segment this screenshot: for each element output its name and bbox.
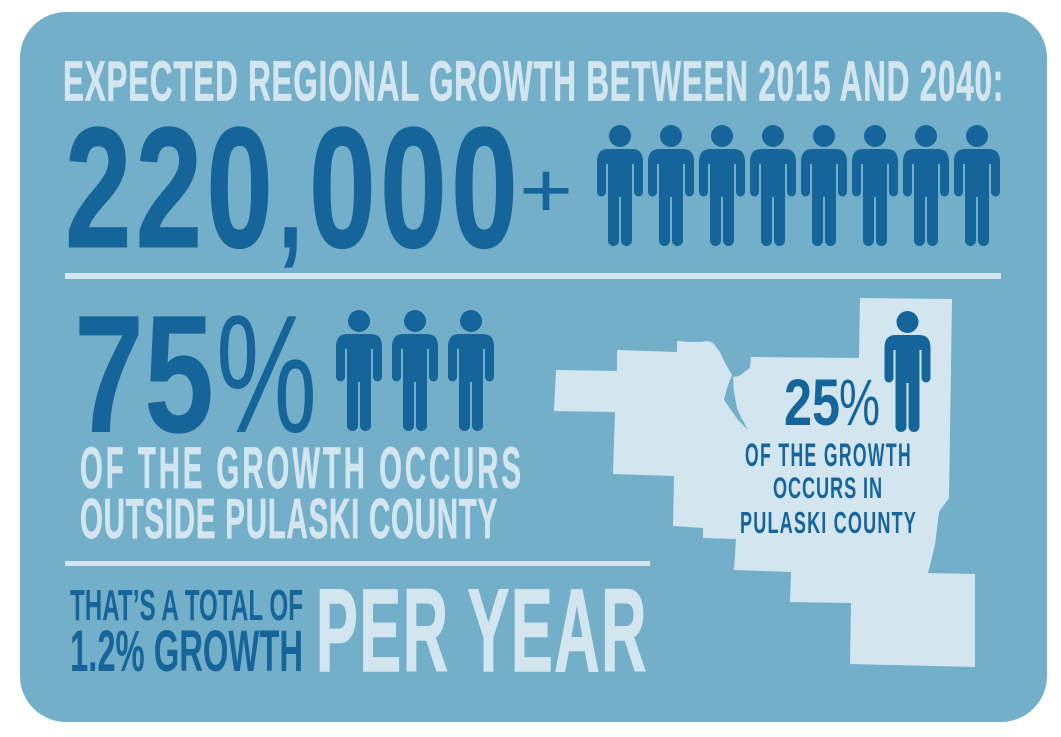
big number: 75%: % xyxy=(216,280,317,468)
icon: person on map xyxy=(884,311,930,432)
map: Pulaski County region xyxy=(554,298,975,667)
text: in Pulaski County: OCCURS IN xyxy=(773,472,883,505)
big number: 75%: 75 xyxy=(74,280,214,468)
text: per year: PER YEAR xyxy=(316,565,648,697)
big number: 220,000: 220 xyxy=(65,92,277,284)
big number: 25%: 25 xyxy=(784,365,840,439)
text: in Pulaski County: OF THE GROWTH xyxy=(745,437,912,473)
big number: 220,000: , xyxy=(279,129,302,275)
text: outside Pulaski County xyxy=(80,436,524,551)
text: total of 1.2% growth: THAT’S A TOTAL OF xyxy=(70,581,303,630)
big number: 25%: % xyxy=(839,365,880,439)
text: outside Pulaski County: OF THE GROWTH OCCURS xyxy=(80,436,524,501)
text: in Pulaski County: PULASKI COUNTY xyxy=(740,505,917,540)
text: in Pulaski County xyxy=(740,437,917,540)
plus sign: + xyxy=(519,146,573,234)
text: total of 1.2% growth: 1.2% GROWTH xyxy=(70,619,303,684)
text: outside Pulaski County: OUTSIDE PULASKI COUNTY xyxy=(80,487,498,551)
big number: 220,000: 000 xyxy=(309,92,522,284)
text: total of 1.2% growth xyxy=(70,581,303,684)
big number: 220,000 xyxy=(65,92,522,284)
icon row: three people xyxy=(336,310,494,431)
icon row: eight people xyxy=(597,125,1000,246)
